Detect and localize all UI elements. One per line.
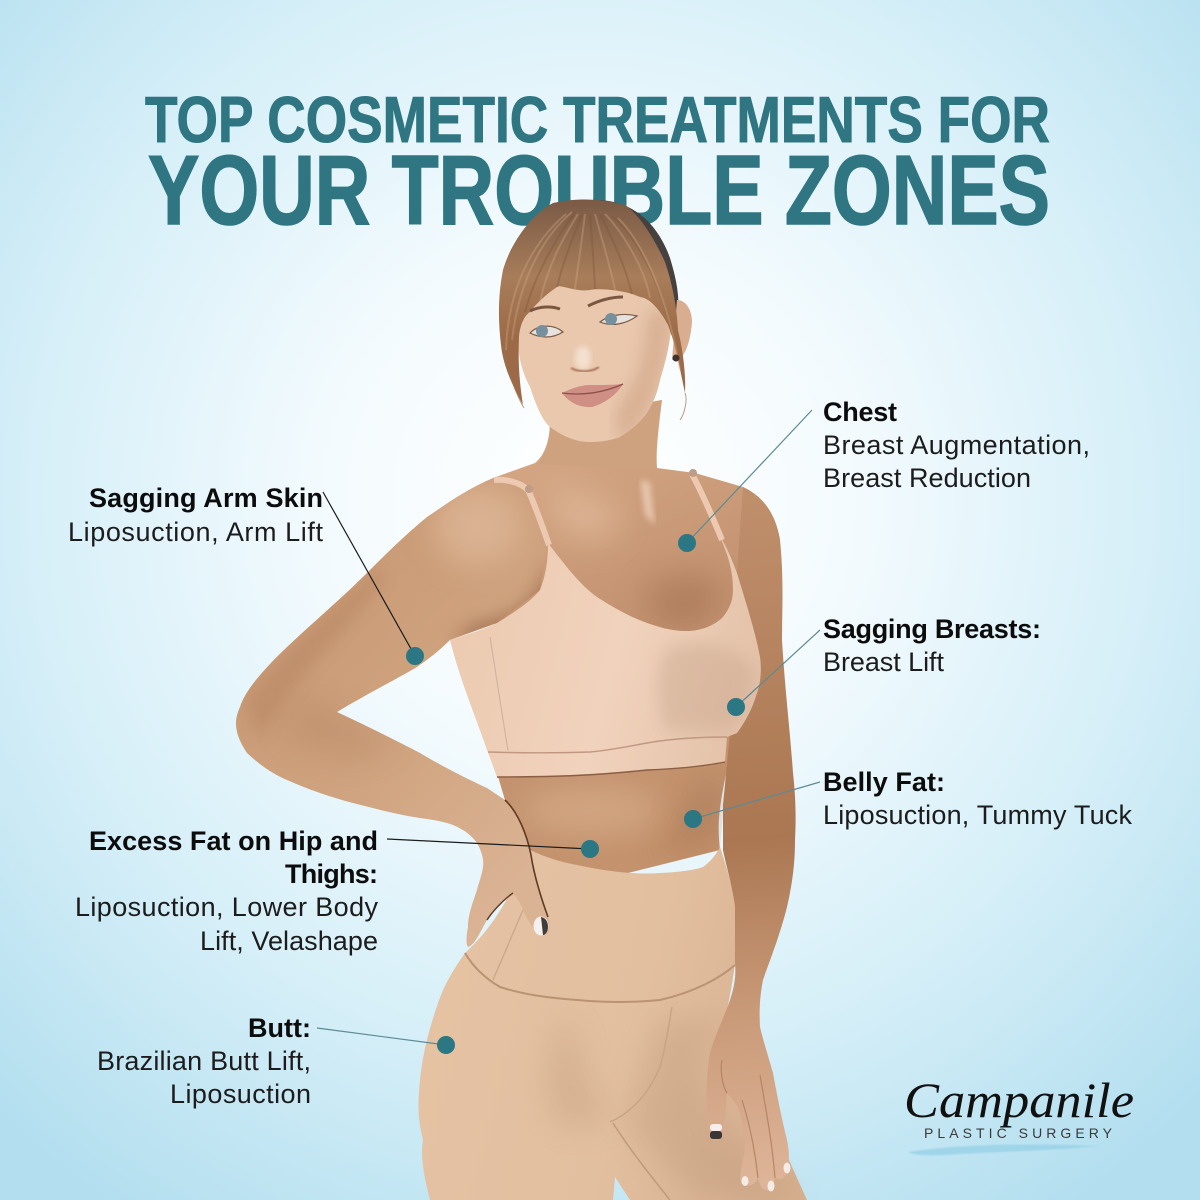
line: sagging breasts <box>736 630 820 707</box>
outer arm edge shadow <box>250 580 374 726</box>
neck <box>538 400 662 470</box>
white nails <box>742 1162 790 1192</box>
line: sagging arm skin <box>323 492 415 656</box>
nose highlight <box>575 346 591 370</box>
neck highlight <box>640 480 655 525</box>
nail art thigh hand <box>710 1124 722 1139</box>
midriff highlight <box>520 786 660 834</box>
waist shadow <box>674 778 726 850</box>
strap buckle right <box>689 469 697 477</box>
torso skin <box>490 400 780 880</box>
torso shading <box>520 480 725 860</box>
callout: chest: Breast Reduction <box>823 463 1031 493</box>
callout: chest <box>823 397 1090 493</box>
right eye <box>600 313 637 325</box>
callout: sagging arm skin <box>68 483 323 547</box>
callout: butt: Butt: <box>248 1013 311 1043</box>
callout: sagging breasts <box>823 614 1041 677</box>
left strap <box>494 480 549 545</box>
cleavage shadow <box>645 570 719 631</box>
strap buckle left <box>525 485 533 493</box>
logo <box>904 1072 1134 1155</box>
lip line <box>562 384 623 394</box>
dot: hip <box>581 840 599 858</box>
bra folds <box>658 644 755 732</box>
face shading <box>575 310 672 445</box>
callout: belly fat: Belly Fat: <box>823 767 945 797</box>
earring <box>672 354 680 362</box>
right strap <box>692 474 722 540</box>
nostrils <box>571 367 599 371</box>
marker dots <box>406 534 745 1054</box>
leggings <box>418 847 807 1200</box>
dot: chest <box>678 534 696 552</box>
nail art hip hand <box>534 916 548 936</box>
line: belly fat <box>693 782 820 819</box>
callout: excess fat on hip and thighs: Lift, Velashape <box>200 926 378 956</box>
hair strands <box>506 212 680 370</box>
dot: belly <box>684 810 702 828</box>
shoulder highlight <box>433 485 523 565</box>
left eyebrow <box>530 307 560 311</box>
inner leg seam <box>613 1123 670 1200</box>
right eyebrow <box>588 297 623 306</box>
underarm shadow <box>454 567 544 638</box>
logo brush stroke <box>908 1144 1100 1155</box>
callout: sagging breasts: Sagging Breasts: <box>823 614 1041 644</box>
callout: butt: Brazilian Butt Lift, <box>97 1046 311 1076</box>
callout: excess fat on hip and thighs: Liposuction, Lower Body <box>75 892 378 922</box>
callout: excess fat on hip and thighs: Thighs: <box>285 859 378 889</box>
bra <box>450 537 761 777</box>
line: hip and thighs <box>387 839 590 849</box>
right cheek shade <box>615 310 672 445</box>
right arm <box>707 487 796 1190</box>
woman figure <box>236 199 807 1200</box>
dot: arm <box>406 647 424 665</box>
callout: excess fat on hip and thighs: Excess Fat on Hip and <box>89 826 378 856</box>
bra band seams <box>488 737 727 753</box>
finger lines <box>721 1060 775 1178</box>
hair <box>499 199 685 405</box>
loose hair tendrils <box>503 345 686 420</box>
ear <box>672 300 692 360</box>
elbow shadow <box>301 713 364 750</box>
left eye <box>530 325 563 337</box>
lips <box>562 384 623 407</box>
callout: butt: Liposuction <box>170 1079 311 1109</box>
waistband seam <box>465 953 735 1002</box>
callout: butt <box>97 1013 311 1109</box>
callout: belly fat: Liposuction, Tummy Tuck <box>823 800 1132 830</box>
logo script name: Campanile <box>904 1072 1134 1128</box>
line: chest <box>687 410 812 543</box>
left arm and hand <box>236 478 550 947</box>
callout: excess fat on hip and thighs <box>75 826 378 956</box>
back hair <box>600 200 679 320</box>
logo subtitle: PLASTIC SURGERY <box>924 1125 1113 1141</box>
face <box>517 232 672 442</box>
collar highlight <box>551 488 619 544</box>
line: butt <box>317 1028 446 1045</box>
side seam <box>493 910 523 980</box>
title <box>145 83 1050 245</box>
legging hip shade <box>625 1020 800 1200</box>
dot: breasts <box>727 698 745 716</box>
legging shadow <box>549 1020 610 1125</box>
dot: butt <box>437 1036 455 1054</box>
callout: sagging arm skin: Sagging Arm Skin <box>89 483 323 513</box>
callout: sagging arm skin: Liposuction, Arm Lift <box>68 517 323 547</box>
hand outline shadow <box>505 800 548 917</box>
bra side seam <box>490 637 508 751</box>
pointer lines <box>317 410 820 1045</box>
callout: chest: Chest <box>823 397 897 427</box>
arm shading <box>245 485 560 760</box>
callout: belly fat <box>823 767 1132 830</box>
centre seam <box>610 1007 672 1122</box>
callout: chest: Breast Augmentation, <box>823 430 1090 460</box>
callout: sagging breasts: Breast Lift <box>823 647 944 677</box>
